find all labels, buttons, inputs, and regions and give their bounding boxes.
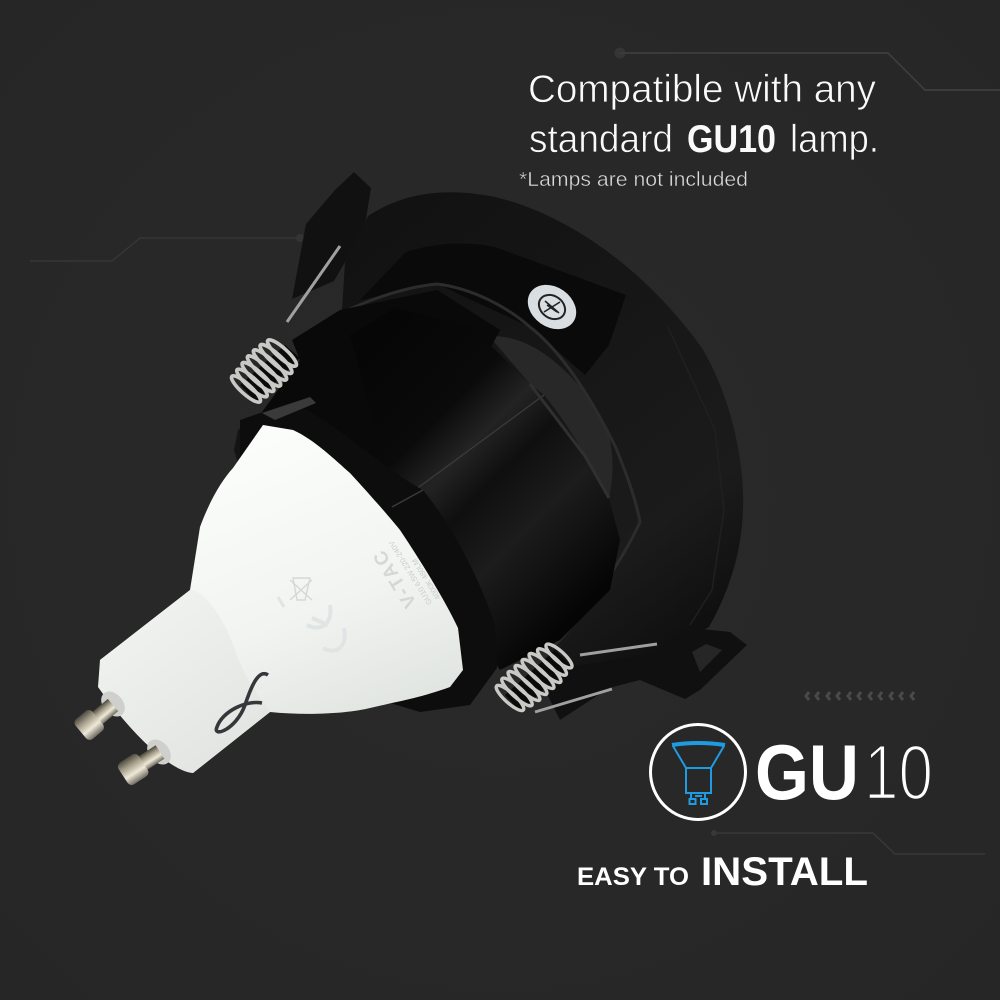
lamp reflector body [100,425,463,773]
strap front edge [305,284,640,648]
ring opening [489,336,613,498]
cylinder lit rim [530,384,609,498]
GU10 label [755,728,933,816]
earth label [519,276,585,338]
chevron row [806,692,914,700]
collar highlight [392,490,423,507]
CE and recycling marks [278,578,345,651]
circuit line bottom right [711,830,985,854]
product photo: recessed spotlight fitting with GU10 lamp [72,172,747,787]
GU10 badge [650,724,933,820]
pin sockets [96,687,176,769]
bottom spring clip [540,629,747,720]
easy to install caption [577,850,868,894]
headline: compatible with any standard GU10 lamp [528,68,879,161]
lamp pin upper [72,695,121,742]
lamp base [98,590,270,773]
lamp markings [369,534,442,618]
lamp pin lower [116,741,167,787]
circuit line left [30,234,304,261]
circuit line top right [614,48,1000,90]
top spring [229,337,300,405]
grainy collar edge under top spring [262,397,316,420]
easy to install caption: INSTALL [701,850,868,894]
GU10 label: 10 [864,728,933,816]
squiggle mark on lamp [216,674,268,732]
cylinder seam [392,395,544,507]
lamp markings: GU10 6.5W 220-240V [387,539,434,607]
top spring clip [292,172,371,299]
flange smooth inner band [360,243,626,375]
flange recess step [668,327,724,625]
GU10 label: GU [755,728,859,816]
headline: compatible with any standard GU10 lamp: lamp. [790,118,879,161]
headline: compatible with any standard GU10 lamp: GU10 [687,118,776,161]
easy to install caption: EASY TO [577,863,689,891]
left rear rim [234,418,263,470]
lamp markings: 4000K 480LM [410,557,442,601]
headline: compatible with any standard GU10 lamp: Compatible with any [528,68,876,111]
lamp holder cylinder [350,308,620,670]
headline: compatible with any standard GU10 lamp: standard [529,118,673,161]
footnote: lamps are not included: *Lamps are not included [519,169,748,191]
holder collar [240,402,497,712]
clip wires [287,246,657,712]
flange ring [340,192,743,668]
lamp markings: V-TAC [369,545,421,611]
bottom spring [493,641,575,714]
icon: GU10 lamp in circle [650,724,746,820]
dark arm mass linking clip and holder [262,290,500,520]
